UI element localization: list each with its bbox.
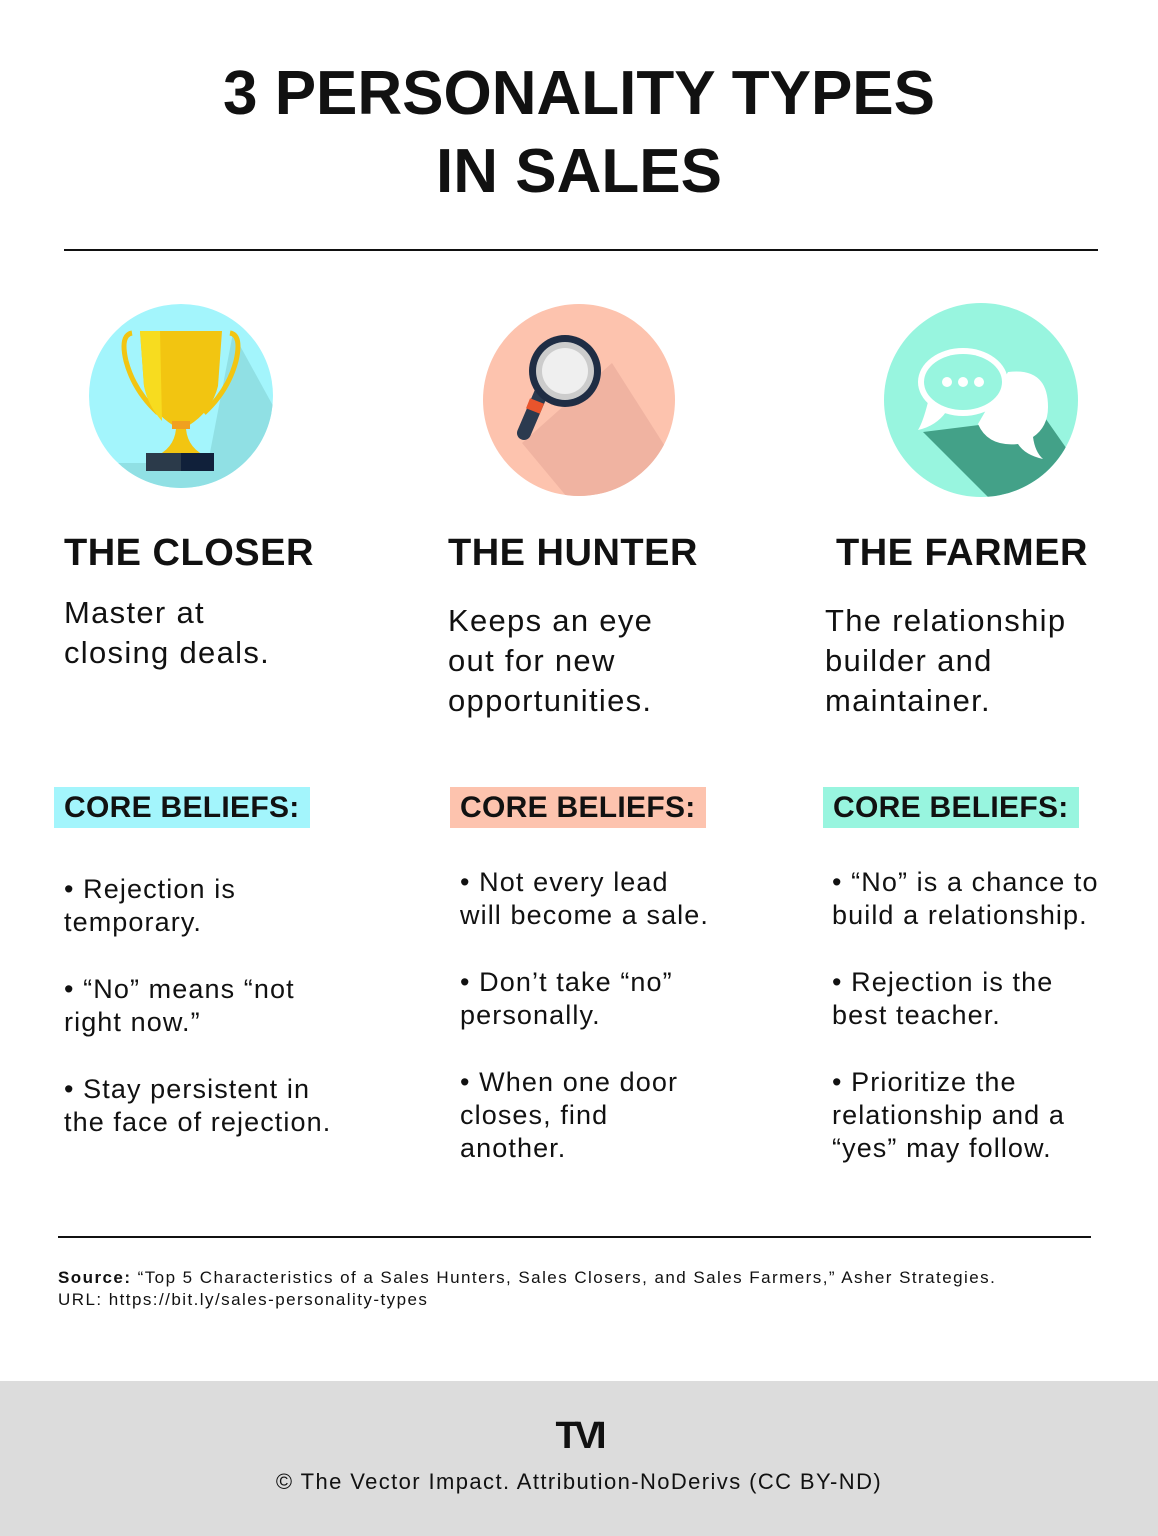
title [223,59,935,206]
title: 3 PERSONALITY TYPES [223,59,935,128]
beliefs: hunter: • Not every lead [460,867,669,897]
column: farmer: The relationship [825,603,1066,638]
beliefs: farmer: • Prioritize the [832,1067,1017,1097]
column: closer [64,532,314,670]
column: farmer: THE FARMER [836,532,1088,574]
beliefs: closer: temporary. [64,907,202,937]
column: hunter: opportunities. [448,683,652,718]
column: farmer: maintainer. [825,683,991,718]
beliefs: farmer: • Rejection is the [832,967,1053,997]
beliefs: closer [64,874,331,1137]
beliefs: closer: • “No” means “not [64,974,295,1004]
core beliefs label: farmer: CORE BELIEFS: [833,791,1069,824]
column: hunter: out for new [448,643,616,678]
column: hunter: THE HUNTER [448,532,698,574]
beliefs: farmer: relationship and a [832,1100,1065,1130]
beliefs: hunter: another. [460,1133,566,1163]
beliefs: farmer [832,867,1099,1163]
beliefs: farmer: • “No” is a chance to [832,867,1099,897]
icon: speech bubbles [884,303,1078,497]
icon: trophy [89,304,273,488]
copyright: © The Vector Impact. Attribution-NoDerivs (CC BY-ND) [276,1469,882,1494]
beliefs: farmer: build a relationship. [832,900,1088,930]
column: hunter: Keeps an eye [448,603,653,638]
beliefs: closer: • Rejection is [64,874,236,904]
source: URL: https://bit.ly/sales-personality-types [58,1290,428,1309]
beliefs: closer: the face of rejection. [64,1107,331,1137]
column: closer: closing deals. [64,635,270,670]
beliefs: closer: • Stay persistent in [64,1074,310,1104]
beliefs: hunter: personally. [460,1000,601,1030]
beliefs: hunter: will become a sale. [460,900,709,930]
beliefs: farmer: “yes” may follow. [832,1133,1052,1163]
column: closer: Master at [64,595,205,630]
column: farmer: builder and [825,643,993,678]
column: hunter [448,532,698,718]
column: closer: THE CLOSER [64,532,314,574]
beliefs: farmer: best teacher. [832,1000,1001,1030]
source: Source: “Top 5 Characteristics of a Sales Hunters, Sales Closers, and Sales Farmers,” Asher Strategies. [58,1268,996,1287]
title: IN SALES [436,137,722,206]
beliefs: hunter: closes, find [460,1100,608,1130]
icon: magnifier [483,304,675,496]
core beliefs label: hunter: CORE BELIEFS: [460,791,696,824]
beliefs: hunter [460,867,709,1163]
beliefs: closer: right now.” [64,1007,201,1037]
footer [0,1381,1158,1536]
beliefs: hunter: • When one door [460,1067,678,1097]
column: farmer [825,532,1088,718]
logo: TVI [555,1415,603,1457]
core beliefs label: closer: CORE BELIEFS: [64,791,300,824]
beliefs: hunter: • Don’t take “no” [460,967,673,997]
source [58,1268,996,1309]
